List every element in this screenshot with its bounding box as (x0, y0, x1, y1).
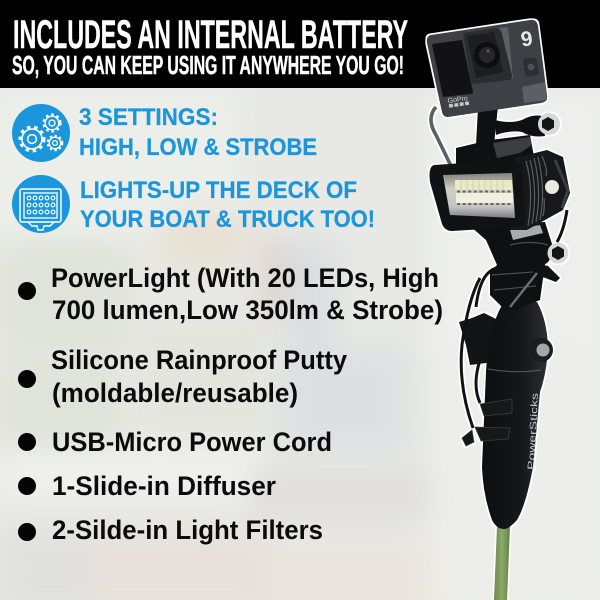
header band (0, 0, 600, 88)
deck lighting text: LIGHTS-UP THE DECK OF (80, 177, 357, 204)
handle bolt (529, 338, 553, 362)
light body (430, 150, 570, 231)
bullet: Silicone putty: (moldable/reusable) (52, 378, 298, 408)
bullet: PowerLight (18, 263, 443, 325)
bullet: USB cord: USB-Micro Power Cord (52, 427, 332, 457)
bullet: Silicone putty: Silicone Rainproof Putty (51, 345, 347, 375)
bullet: PowerLight: PowerLight (With 20 LEDs, High (51, 263, 439, 293)
bullet: light filters: 2-Silde-in Light Filters (52, 515, 323, 545)
small thumb tab (538, 264, 560, 282)
GoPro camera (427, 20, 547, 117)
settings text: HIGH, LOW & STROBE (79, 134, 317, 161)
clip on light (493, 137, 532, 158)
camera bracket cable (431, 107, 452, 168)
handle seam (488, 369, 541, 372)
lower mount (470, 222, 552, 312)
bullet: PowerLight: 700 lumen,Low 350lm & Strobe) (52, 295, 443, 325)
upper mount (456, 106, 545, 170)
cable connectors (462, 399, 512, 446)
silver band and strap (510, 225, 543, 307)
power cables (461, 210, 567, 428)
settings text (79, 104, 317, 161)
side knob (459, 313, 498, 365)
handle (482, 300, 548, 529)
GoPro camera: GoPro (447, 95, 468, 105)
PowerSticks label: PowerSticks (526, 392, 541, 470)
lower hex nut (548, 242, 568, 264)
settings text: 3 SETTINGS: (79, 104, 218, 131)
product: camera, light and PowerStick handle (427, 20, 570, 600)
icon: gears (12, 104, 70, 162)
green stem (494, 526, 510, 600)
deck lighting text (80, 177, 375, 233)
upper hex nut (538, 113, 560, 135)
mount highlights (492, 242, 548, 290)
icon: LED light panel (12, 175, 70, 233)
feature list (18, 263, 443, 545)
bullet: diffuser: 1-Slide-in Diffuser (52, 471, 276, 501)
deck lighting text: YOUR BOAT & TRUCK TOO! (80, 206, 375, 233)
GoPro camera: 9 (519, 27, 534, 52)
LED rows (455, 180, 513, 204)
bullet: Silicone putty (18, 345, 347, 408)
